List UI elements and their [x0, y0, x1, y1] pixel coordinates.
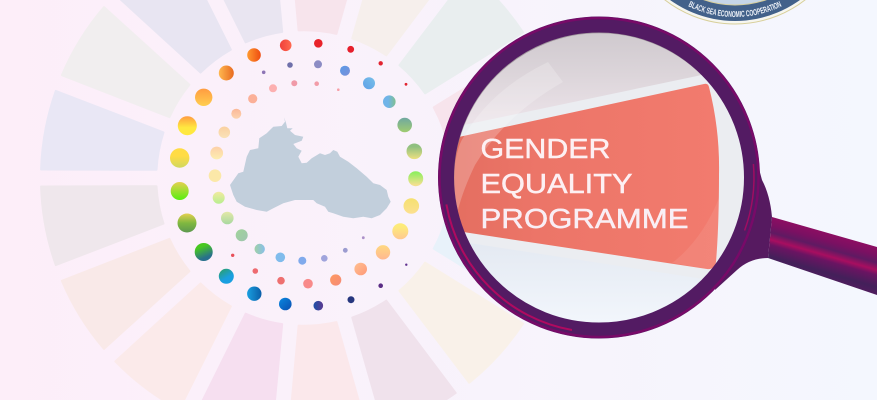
programme title: [480, 133, 688, 234]
magnifier handle: [768, 217, 877, 295]
programme title: PROGRAMME: [480, 203, 688, 234]
programme title: GENDER: [480, 133, 610, 164]
magnifier lens with magnified red segment: [454, 32, 744, 309]
coloured dot rings: [170, 39, 423, 311]
SDG wheel of 17 pale segments: [38, 0, 567, 400]
Black Sea Economic Cooperation logo: [664, 0, 806, 24]
magnifying glass: [440, 18, 877, 337]
Black Sea map silhouette: [230, 117, 391, 218]
magnifier neck joint: [715, 165, 772, 290]
programme title: EQUALITY: [480, 168, 632, 199]
magnifier ring: [440, 18, 758, 337]
